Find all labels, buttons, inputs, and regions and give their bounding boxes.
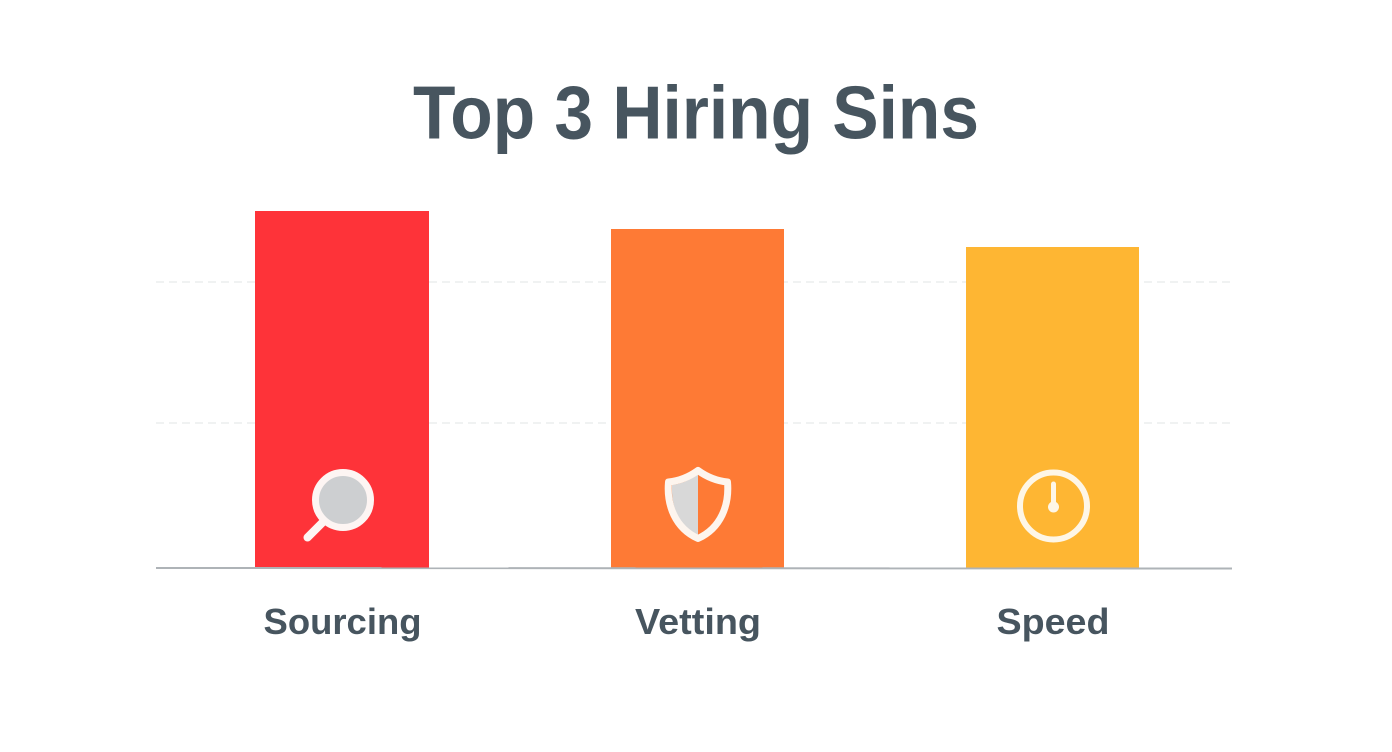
title: Top 3 Hiring Sins bbox=[413, 70, 979, 154]
axis baseline bbox=[156, 567, 1232, 570]
icon: clock bbox=[1020, 472, 1087, 540]
icon: magnifying glass bbox=[308, 472, 370, 538]
label: Sourcing: Sourcing bbox=[264, 601, 422, 642]
bar: Sourcing bbox=[255, 211, 429, 568]
label: Vetting: Vetting bbox=[635, 601, 761, 642]
label: Speed: Speed bbox=[996, 601, 1110, 642]
bar: Speed bbox=[966, 247, 1139, 568]
bar: Vetting bbox=[611, 229, 784, 568]
icon: shield bbox=[668, 470, 728, 538]
